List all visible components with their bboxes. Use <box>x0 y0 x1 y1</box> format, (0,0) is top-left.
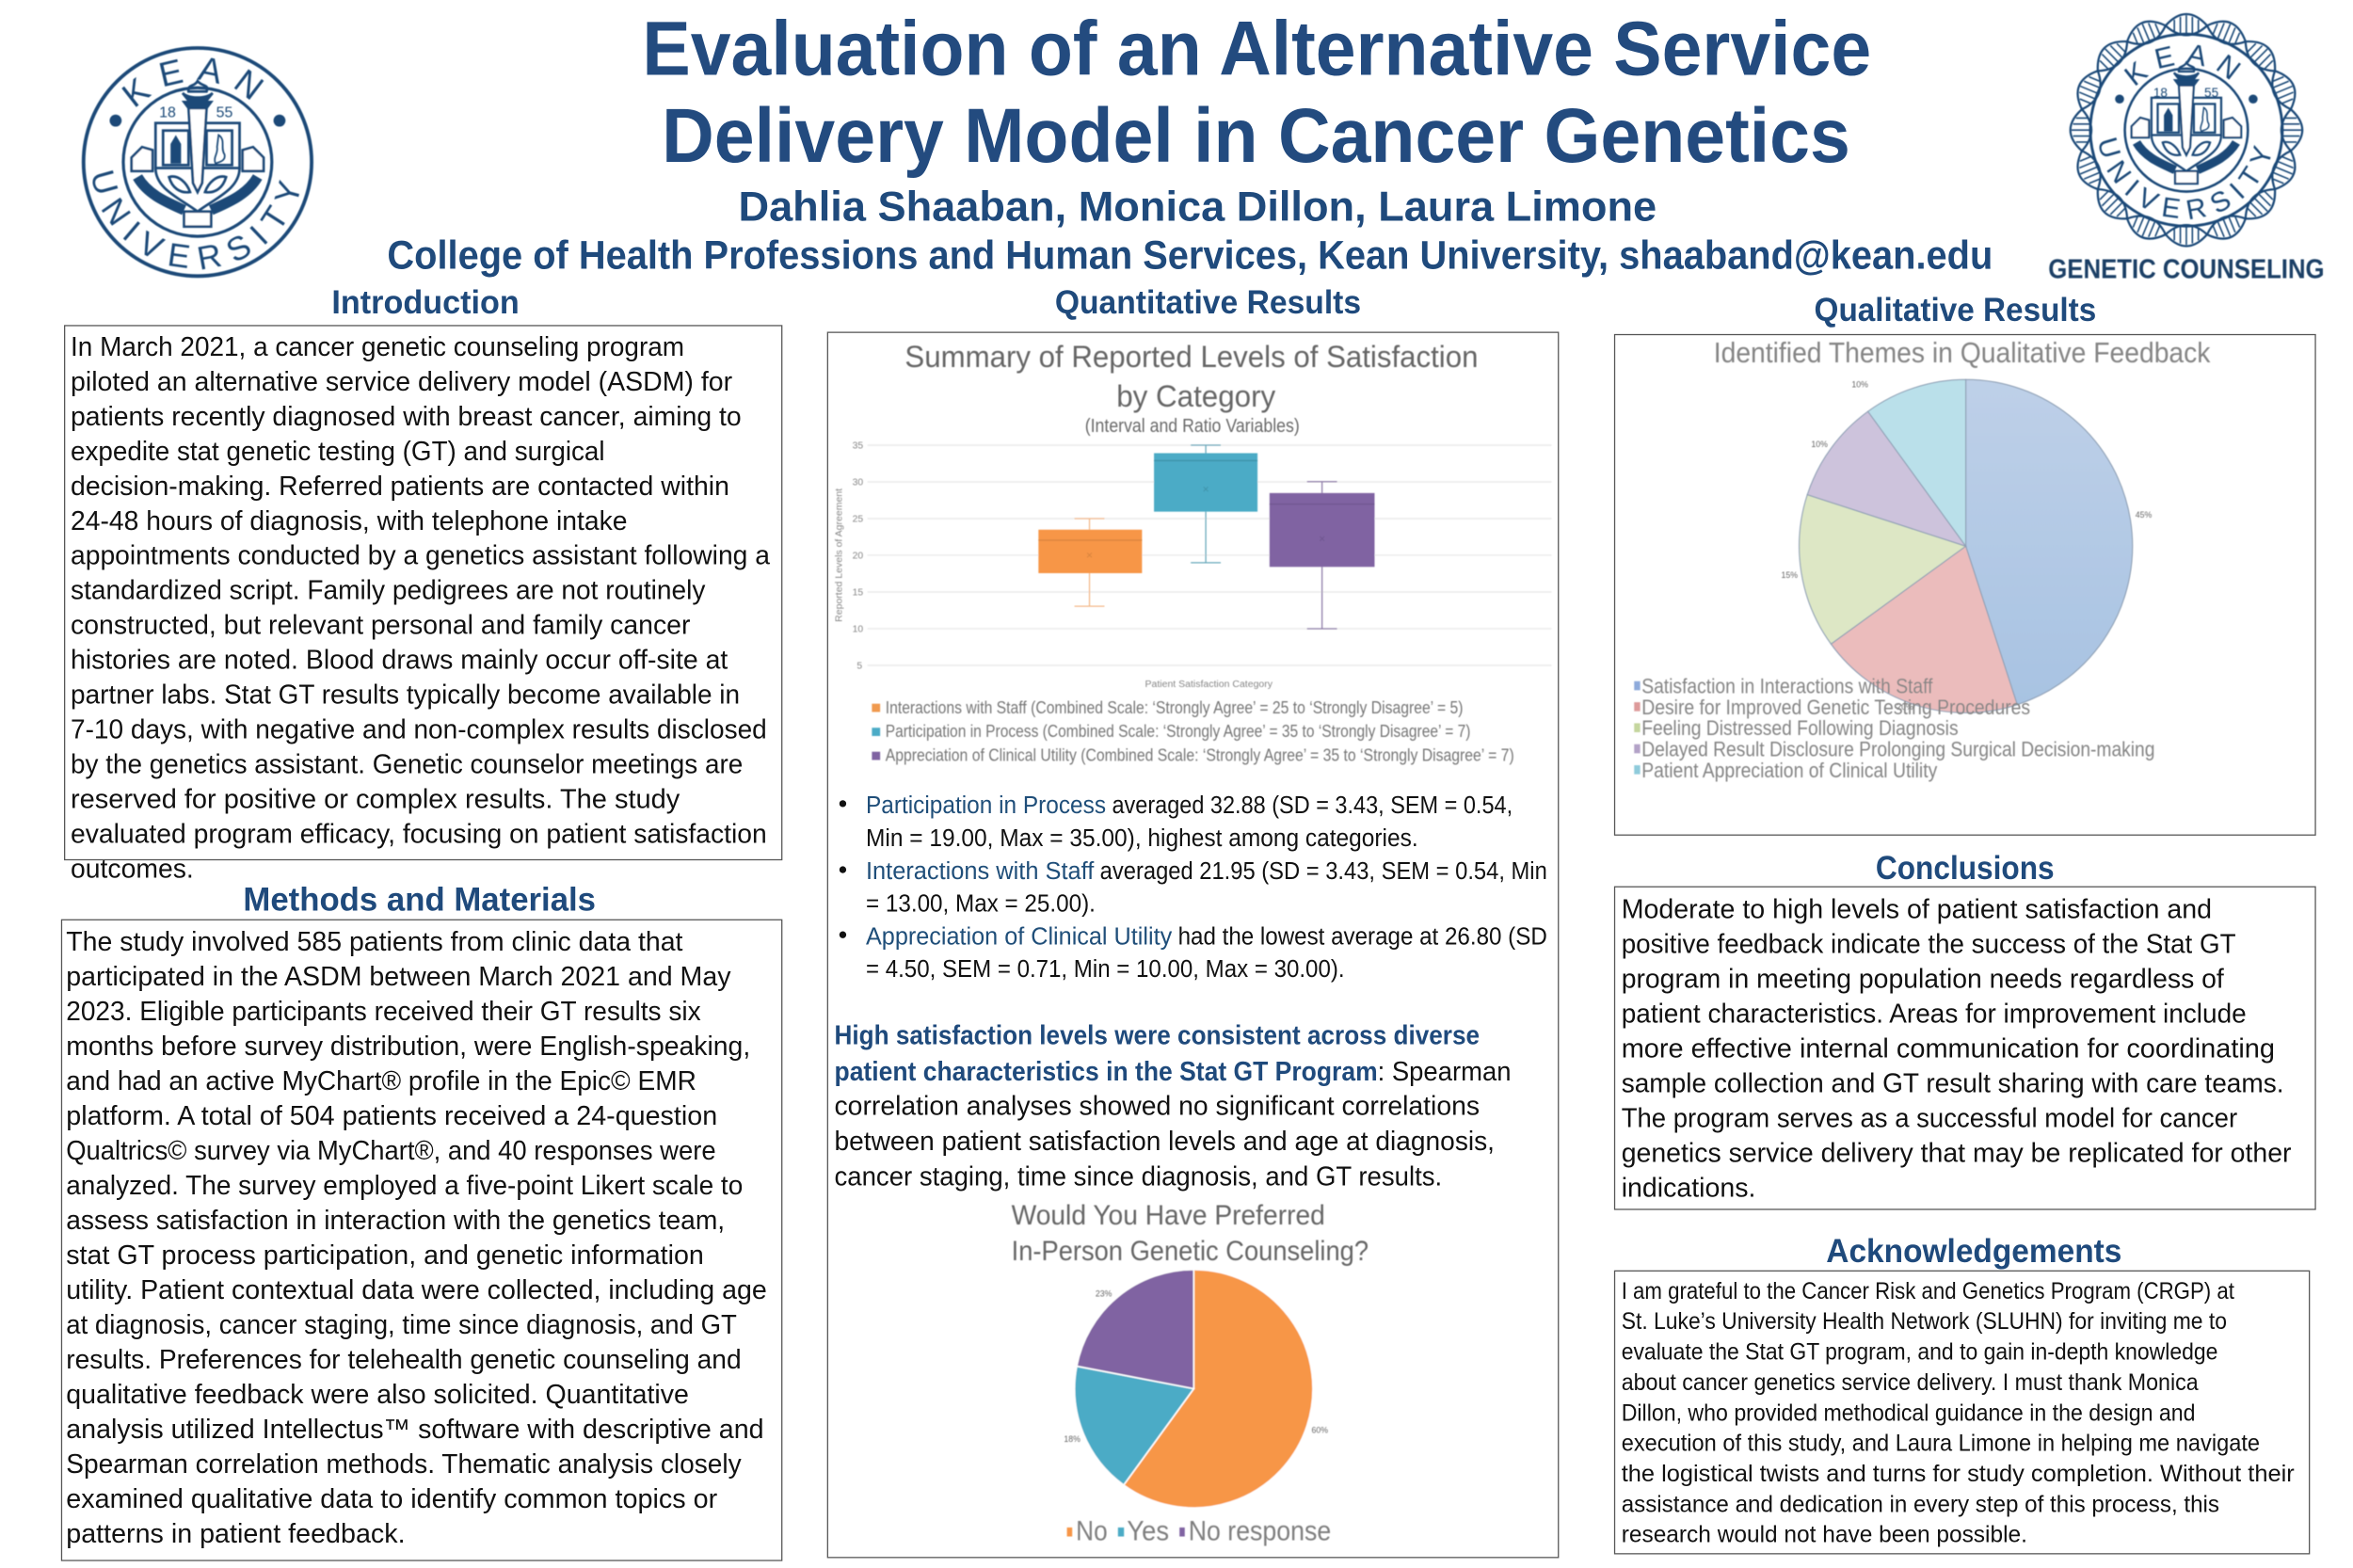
pie chart: identified themes <box>1634 338 2211 782</box>
logo: Kean University seal: 55 <box>216 104 233 120</box>
heading: methods and materials: Methods and Materials <box>243 882 596 919</box>
panel: introduction: partner labs. Stat GT results typically become available in <box>71 680 740 711</box>
title: Delivery Model in Cancer Genetics <box>662 93 1850 179</box>
bullet: appreciation of clinical utility: had the lowest average at 26.80 (SD <box>1178 922 1547 951</box>
panel: conclusions: Moderate to high levels of patient satisfaction and <box>1622 895 2212 925</box>
panel: conclusions: The program serves as a successful model for cancer <box>1622 1104 2238 1134</box>
pie chart: identified themes: Feeling Distressed Following Diagnosis <box>1641 716 1959 740</box>
panel: introduction: decision-making. Referred patients are contacted within <box>71 472 729 502</box>
bullet: participation in process: averaged 32.88 (SD = 3.43, SEM = 0.54, <box>1112 791 1513 819</box>
bullet: interactions with staff: = 13.00, Max = 25.00). <box>866 889 1096 918</box>
box plot: satisfaction by category: 30 <box>853 478 863 488</box>
panel: conclusions: genetics service delivery that may be replicated for other <box>1622 1139 2292 1169</box>
pie chart: identified themes: 10% <box>1811 440 1828 449</box>
pie chart: preferred in-person counseling: Would You Have Preferred <box>1012 1200 1325 1231</box>
pie chart: identified themes: Satisfaction in Interactions with Staff <box>1641 675 1933 698</box>
text block: spearman correlation: correlation analyses showed no significant correlations <box>835 1092 1480 1122</box>
box plot: satisfaction by category: 5 <box>856 662 862 672</box>
logo: Kean University Genetic Counseling seal: 55 <box>2204 86 2218 100</box>
panel: methods and materials: and had an active MyChart® profile in the Epic© EMR <box>66 1066 696 1096</box>
panel: introduction: appointments conducted by a genetics assistant following a <box>71 541 770 571</box>
box plot: satisfaction by category <box>834 339 1552 764</box>
panel: methods and materials: assess satisfaction in interaction with the genetics team, <box>66 1206 725 1236</box>
logo: Kean University seal: KEAN <box>120 56 264 107</box>
panel: methods and materials: Spearman correlation methods. Thematic analysis closely <box>66 1449 742 1480</box>
panel: quantitative results <box>827 284 1559 1558</box>
panel: acknowledgements: assistance and dedication in every step of this process, this <box>1622 1492 2219 1517</box>
panel: conclusions: positive feedback indicate the success of the Stat GT <box>1622 930 2236 960</box>
panel: methods and materials: Qualtrics© survey via MyChart®, and 40 responses were <box>66 1136 716 1166</box>
authors: Dahlia Shaaban, Monica Dillon, Laura Limone <box>738 184 1657 230</box>
panel: acknowledgements: evaluate the Stat GT program, and to gain in-depth knowledge <box>1622 1340 2217 1366</box>
pie chart: identified themes: 15% <box>1781 570 1798 580</box>
panel: methods and materials: participated in the ASDM between March 2021 and May <box>66 962 731 992</box>
box plot: satisfaction by category: 25 <box>853 515 863 525</box>
pie chart: preferred in-person counseling: No response <box>1189 1516 1331 1547</box>
panel: qualitative results <box>1615 292 2315 835</box>
panel: introduction: by the genetics assistant. Genetic counselor meetings are <box>71 750 743 780</box>
panel: introduction <box>65 284 782 885</box>
box plot: satisfaction by category: Patient Satisfaction Category <box>1145 680 1273 690</box>
box plot: satisfaction by category: Appreciation of Clinical Utility (Combined Scale: ‘Strongly Agree’ = 35 to ‘Strongly Disagree’ = 7) <box>886 744 1514 764</box>
pie chart: preferred in-person counseling <box>1012 1200 1369 1547</box>
text block: spearman correlation: : Spearman <box>1378 1057 1512 1087</box>
panel: methods and materials: utility. Patient contextual data were collected, including age <box>66 1275 767 1305</box>
panel: conclusions: more effective internal communication for coordinating <box>1622 1034 2275 1064</box>
pie chart: identified themes: 20% <box>1897 702 1913 712</box>
logo: Kean University Genetic Counseling seal: KEAN <box>2123 44 2242 87</box>
box plot: satisfaction by category: Reported Levels of Agreement <box>834 488 844 622</box>
panel: methods and materials: analyzed. The survey employed a five-point Likert scale to <box>66 1171 743 1201</box>
pie chart: preferred in-person counseling: In-Person Genetic Counseling? <box>1012 1236 1369 1267</box>
panel: methods and materials: at diagnosis, cancer staging, time since diagnosis, and GT <box>66 1310 737 1340</box>
panel: methods and materials: examined qualitative data to identify common topics or <box>66 1484 718 1514</box>
bullet: participation in process: Participation in Process <box>866 791 1106 819</box>
box plot: satisfaction by category: (Interval and Ratio Variables) <box>1085 416 1300 437</box>
box plot: satisfaction by category: 20 <box>853 552 863 562</box>
box plot: satisfaction by category: 35 <box>853 441 863 452</box>
box plot: satisfaction by category: 10 <box>853 625 863 635</box>
panel: acknowledgements <box>1615 1233 2310 1554</box>
pie chart: preferred in-person counseling: 18% <box>1064 1434 1080 1444</box>
box plot: satisfaction by category: Interactions with Staff (Combined Scale: ‘Strongly Agree’ = 25 to ‘Strongly Disagree’ = 5) <box>886 697 1464 717</box>
panel: introduction: standardized script. Family pedigrees are not routinely <box>71 576 706 606</box>
box plot: satisfaction by category: by Category <box>1116 378 1276 413</box>
pie chart: identified themes: 45% <box>2136 510 2152 520</box>
heading: quantitative results: Quantitative Results <box>1055 284 1361 321</box>
panel: introduction: In March 2021, a cancer genetic counseling program <box>71 332 684 362</box>
pie chart: identified themes: Desire for Improved Genetic Testing Procedures <box>1641 696 2030 719</box>
logo: Kean University seal: 18 <box>159 104 176 120</box>
bullet: interactions with staff: Interactions with Staff <box>866 856 1095 885</box>
panel: conclusions: patient characteristics. Areas for improvement include <box>1622 1000 2247 1030</box>
pie chart: identified themes: Patient Appreciation of Clinical Utility <box>1641 759 1938 782</box>
pie chart: preferred in-person counseling: 60% <box>1311 1426 1328 1435</box>
title: Evaluation of an Alternative Service <box>642 7 1871 92</box>
panel: acknowledgements: research would not have been possible. <box>1622 1523 2027 1548</box>
panel: methods and materials: The study involved 585 patients from clinic data that <box>66 927 683 957</box>
panel: introduction: outcomes. <box>71 855 194 885</box>
pie chart: preferred in-person counseling: No <box>1076 1516 1108 1547</box>
pie chart: preferred in-person counseling: 23% <box>1096 1288 1112 1298</box>
heading: introduction: Introduction <box>331 284 520 321</box>
panel: introduction: 24-48 hours of diagnosis, with telephone intake <box>71 506 628 536</box>
panel: methods and materials: results. Preferences for telehealth genetic counseling and <box>66 1345 742 1375</box>
panel: methods and materials: patterns in patient feedback. <box>66 1519 406 1549</box>
pie chart: preferred in-person counseling: Yes <box>1127 1516 1169 1547</box>
panel: conclusions <box>1615 850 2315 1209</box>
panel: methods and materials: stat GT process participation, and genetic information <box>66 1240 704 1271</box>
text block: spearman correlation <box>835 1021 1512 1192</box>
heading: acknowledgements: Acknowledgements <box>1826 1233 2121 1270</box>
bullet: interactions with staff: averaged 21.95 (SD = 3.43, SEM = 0.54, Min <box>1100 856 1547 885</box>
bullet: interactions with staff <box>840 856 1547 918</box>
panel: acknowledgements: St. Luke’s University Health Network (SLUHN) for inviting me to <box>1622 1309 2227 1335</box>
panel: introduction: histories are noted. Blood draws mainly occur off-site at <box>71 646 728 676</box>
panel: acknowledgements: I am grateful to the Cancer Risk and Genetics Program (CRGP) at <box>1622 1279 2234 1304</box>
affiliation: College of Health Professions and Human Services, Kean University, shaaband@kean.edu <box>387 232 1993 278</box>
panel: methods and materials: months before survey distribution, were English-speaking, <box>66 1032 750 1062</box>
logo: Kean University seal: UNIVERSITY <box>92 169 300 270</box>
panel: methods and materials: platform. A total of 504 patients received a 24-question <box>66 1101 717 1131</box>
panel: conclusions: indications. <box>1622 1174 1755 1204</box>
bullet: appreciation of clinical utility <box>840 922 1547 983</box>
panel: methods and materials: analysis utilized Intellectus™ software with descriptive and <box>66 1415 764 1445</box>
panel: acknowledgements: Dillon, who provided methodical guidance in the design and <box>1622 1400 2196 1426</box>
bullet: appreciation of clinical utility: = 4.50, SEM = 0.71, Min = 10.00, Max = 30.00). <box>866 954 1345 983</box>
panel: introduction: 7-10 days, with negative and non-complex results disclosed <box>71 715 767 745</box>
text block: spearman correlation: patient characteristics in the Stat GT Program <box>835 1057 1378 1087</box>
panel: conclusions: program in meeting population needs regardless of <box>1622 965 2225 995</box>
pie chart: identified themes: 10% <box>1851 379 1868 389</box>
panel: acknowledgements: the logistical twists and turns for study completion. Without their <box>1622 1462 2295 1487</box>
bullet: appreciation of clinical utility: Appreciation of Clinical Utility <box>866 922 1173 951</box>
logo: Kean University Genetic Counseling seal: 18 <box>2153 86 2168 100</box>
box plot: satisfaction by category: Summary of Reported Levels of Satisfaction <box>904 339 1478 374</box>
heading: qualitative results: Qualitative Results <box>1815 292 2096 328</box>
logo: Kean University Genetic Counseling seal <box>2048 12 2325 285</box>
logo: Kean University Genetic Counseling seal: UNIVERSITY <box>2099 137 2272 220</box>
panel: introduction: piloted an alternative service delivery model (ASDM) for <box>71 367 733 397</box>
panel: methods and materials: 2023. Eligible participants received their GT results six <box>66 997 701 1027</box>
panel: introduction: reserved for positive or complex results. The study <box>71 785 680 815</box>
panel: acknowledgements: execution of this study, and Laura Limone in helping me navigate <box>1622 1432 2260 1457</box>
logo: Kean University Genetic Counseling seal: GENETIC COUNSELING <box>2048 255 2325 285</box>
pie chart: identified themes: Identified Themes in Qualitative Feedback <box>1714 338 2211 369</box>
text block: spearman correlation: High satisfaction levels were consistent across diverse <box>835 1021 1480 1051</box>
panel: introduction: evaluated program efficacy, focusing on patient satisfaction <box>71 820 767 850</box>
panel: methods and materials: qualitative feedback were also solicited. Quantitative <box>66 1380 689 1410</box>
text block: spearman correlation: between patient satisfaction levels and age at diagnosis, <box>835 1127 1495 1157</box>
box plot: satisfaction by category: 15 <box>853 588 863 599</box>
panel: introduction: constructed, but relevant personal and family cancer <box>71 611 691 641</box>
bullet: participation in process: Min = 19.00, Max = 35.00), highest among categories. <box>866 824 1418 852</box>
pie chart: identified themes: Delayed Result Disclosure Prolonging Surgical Decision-making <box>1641 738 2154 761</box>
bullet: participation in process <box>840 791 1513 852</box>
panel: introduction: patients recently diagnosed with breast cancer, aiming to <box>71 402 742 432</box>
logo: Kean University seal <box>81 45 314 279</box>
heading: conclusions: Conclusions <box>1876 850 2055 887</box>
text block: spearman correlation: cancer staging, time since diagnosis, and GT results. <box>835 1161 1442 1192</box>
title <box>642 7 1871 179</box>
panel: methods and materials <box>61 882 782 1560</box>
panel: introduction: expedite stat genetic testing (GT) and surgical <box>71 437 605 467</box>
box plot: satisfaction by category: Participation in Process (Combined Scale: ‘Strongly Agree’ = 35 to ‘Strongly Disagree’ = 7) <box>886 721 1470 741</box>
panel: acknowledgements: about cancer genetics service delivery. I must thank Monica <box>1622 1370 2199 1396</box>
panel: conclusions: sample collection and GT result sharing with care teams. <box>1622 1069 2284 1099</box>
